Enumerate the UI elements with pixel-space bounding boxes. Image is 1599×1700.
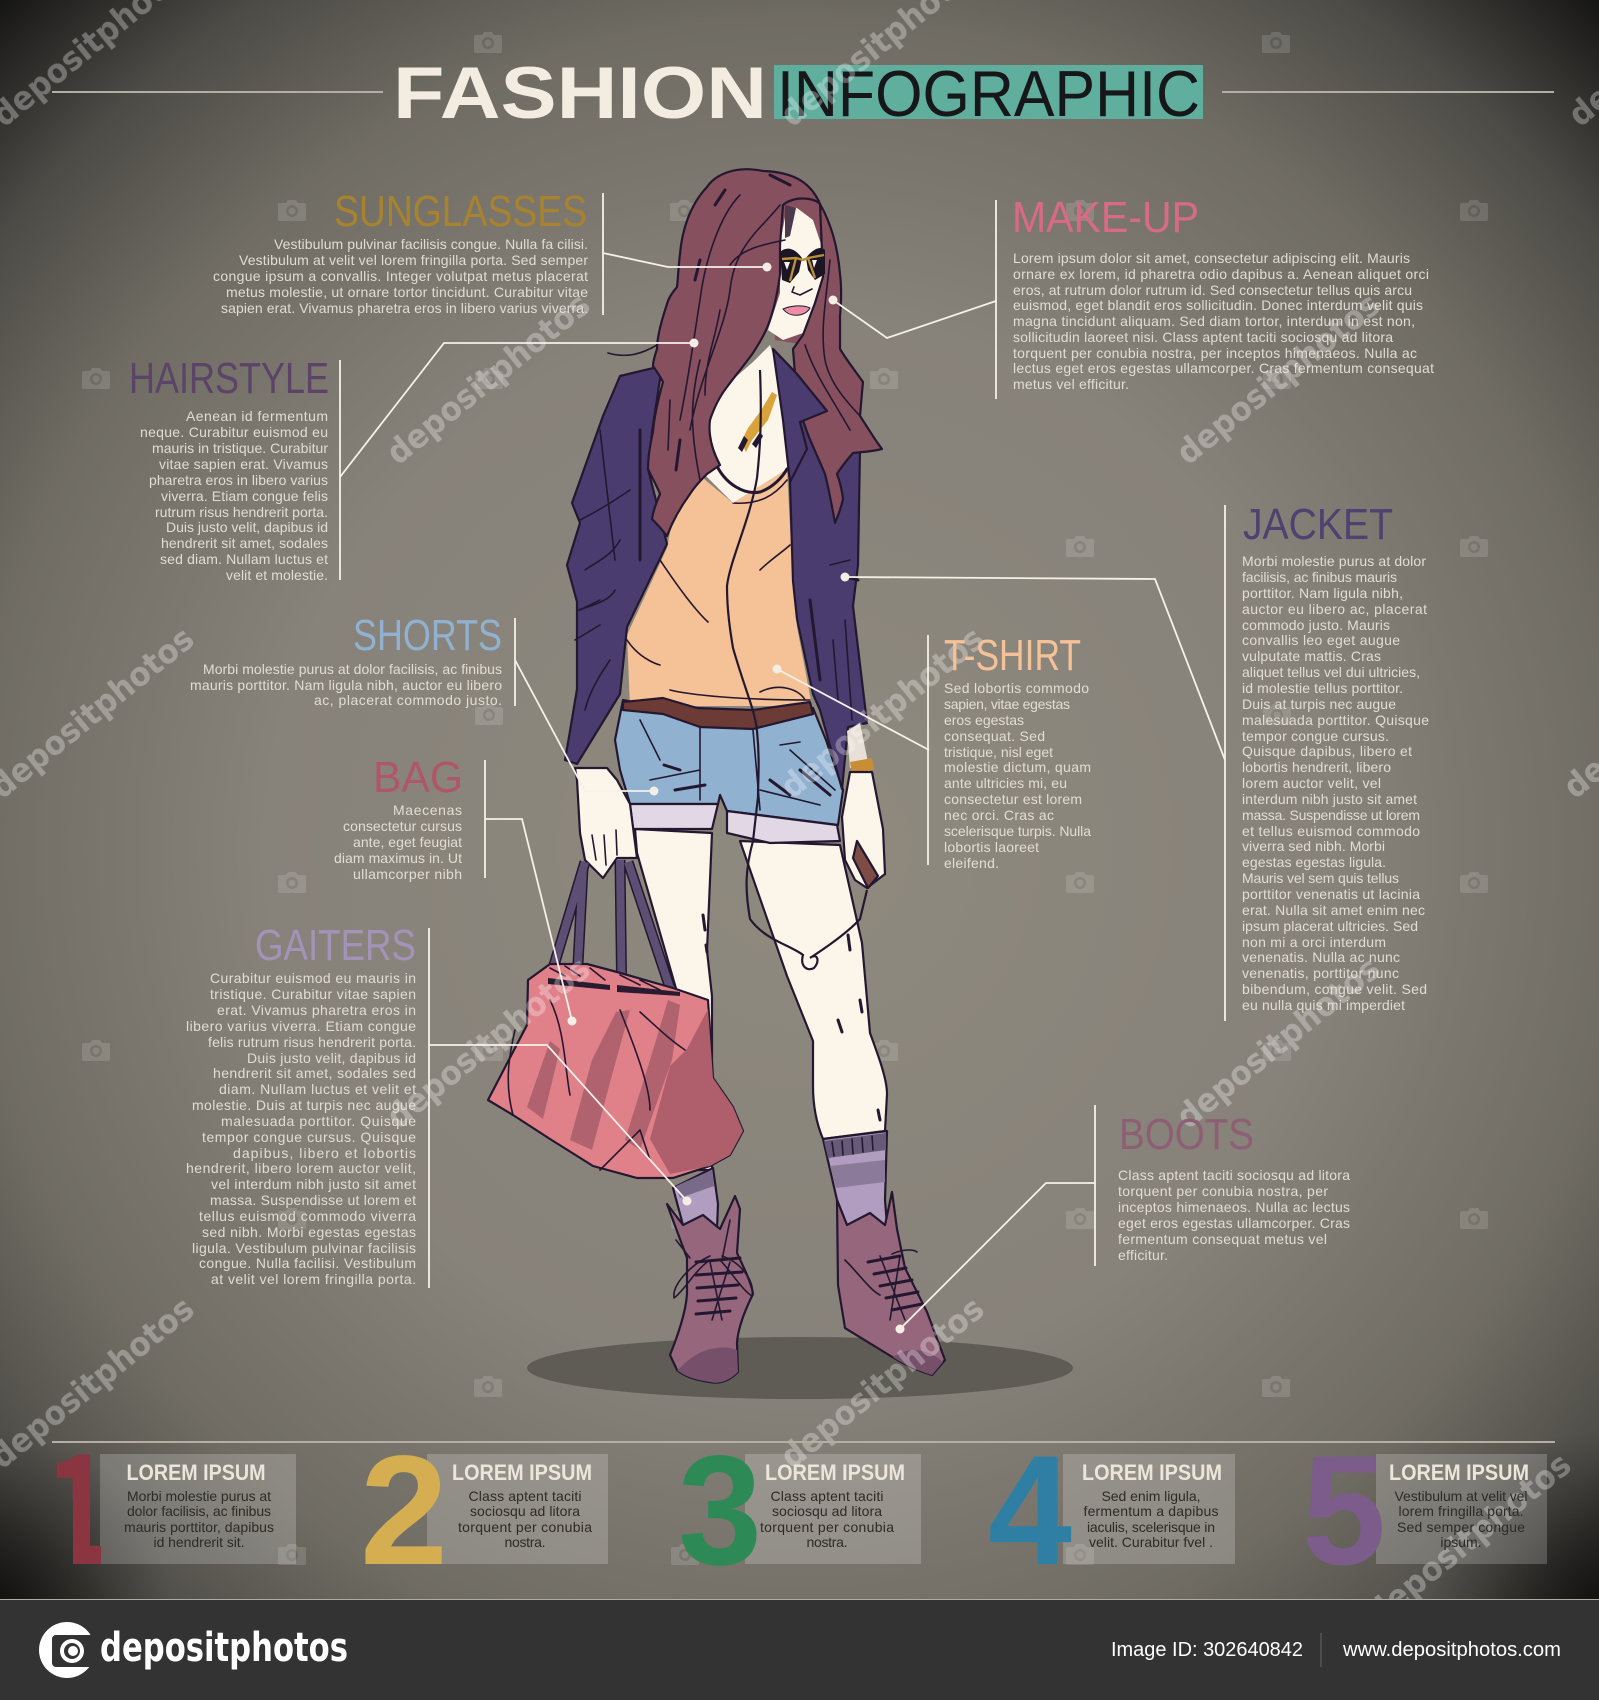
panel: jacket (840, 500, 1429, 1021)
text: gaiters: libero varius viverra. Etiam congue (186, 1018, 416, 1034)
number 4: 4 (988, 1424, 1072, 1598)
text: bag: ullamcorper nibh (353, 866, 462, 882)
number 3: 3 (678, 1424, 762, 1598)
text: jacket: massa. Suspendisse ut lorem (1242, 807, 1420, 823)
watermarks: depositphotos: depositphotos (772, 619, 991, 806)
jacket left (565, 366, 667, 764)
text: jacket: lorem auctor velit, vel (1242, 775, 1381, 791)
neckline (715, 462, 787, 493)
text: make-up: ornare ex lorem, id pharetra odio dapibus a. Aenean aliquet orci (1013, 266, 1429, 282)
heading: shorts: SHORTS (353, 611, 502, 660)
text: sunglasses: sapien erat. Vivamus pharetra eros in libero varius viverra. (221, 300, 588, 316)
t-shirt folds (627, 480, 810, 700)
ground shadow (527, 1337, 1073, 1399)
fingers (592, 830, 617, 865)
watermarks: depositphotos: depositphotos (378, 949, 597, 1136)
text: jacket: egestas egestas ligula. (1242, 854, 1386, 870)
callout line: shorts (515, 618, 658, 796)
text: gaiters: massa. Suspendisse ut lorem et (210, 1192, 416, 1208)
text: gaiters: molestie. Duis at turpis nec augue (192, 1097, 416, 1113)
leg ink marks (703, 915, 880, 1120)
step 5 heading: LOREM IPSUM (1389, 1460, 1529, 1485)
step 4 heading: LOREM IPSUM (1082, 1460, 1222, 1485)
step 2 heading: LOREM IPSUM (452, 1460, 592, 1485)
number 1: 1 (44, 1388, 114, 1608)
text: jacket: tempor congue cursus. (1242, 728, 1389, 744)
watch band (850, 758, 874, 773)
text: gaiters (186, 970, 416, 1287)
lips (783, 306, 810, 315)
camera watermark grid (82, 32, 1488, 1565)
text: make-up: lectus eget eros egestas ullamcorper. Cras fermentum consequat (1013, 360, 1434, 376)
text: make-up (1013, 250, 1434, 392)
jacket lapel (773, 349, 827, 482)
text: make-up: sollicitudin laoreet nisi. Class aptent taciti sociosqu ad litora (1013, 329, 1393, 345)
text: boots: fermentum consequat metus vel (1118, 1231, 1327, 1247)
text: hairstyle: sed diam. Nullam luctus et (160, 551, 328, 567)
step 1 heading: LOREM IPSUM (126, 1460, 266, 1485)
text: t-shirt: molestie dictum, quam (944, 759, 1091, 775)
callout line: boots (896, 1105, 1095, 1334)
text: jacket: venenatis, porttitor nunc (1242, 965, 1399, 981)
boot laces (674, 1220, 943, 1383)
text: gaiters: congue. Nulla facilisi. Vestibulum (199, 1255, 416, 1271)
necklace (741, 392, 777, 452)
step 5 (1302, 1424, 1547, 1598)
watermarks: depositphotos: depositphotos (1168, 285, 1387, 472)
text: t-shirt: lobortis laoreet (944, 839, 1039, 855)
watermarks: depositphotos: depositphotos (772, 1289, 991, 1476)
step 1 text: dolor facilisis, ac finibus (127, 1503, 271, 1519)
text: make-up: magna tincidunt aliquam. Sed diam tortor, interdum in est non, (1013, 313, 1415, 329)
step 1 (44, 1388, 296, 1608)
text: gaiters: hendrerit, libero lorem auctor velit, (186, 1160, 416, 1176)
text: hairstyle: mauris in tristique. Curabitur (152, 440, 328, 456)
text: jacket: et tellus euismod commodo (1242, 823, 1420, 839)
text: jacket: facilisis, ac finibus mauris (1242, 569, 1397, 585)
text: boots (1118, 1167, 1350, 1263)
panel: gaiters (186, 921, 692, 1288)
text: gaiters: felis rutrum risus hendrerit porta. (208, 1034, 416, 1050)
text: jacket: auctor eu libero ac, placerat (1242, 601, 1427, 617)
step 5 text: ipsum. (1440, 1534, 1482, 1550)
callout line: bag (485, 760, 576, 1026)
step 2 text: sociosqu ad litora (470, 1503, 580, 1519)
text: gaiters: erat. Vivamus pharetra eros in (217, 1002, 416, 1018)
title word: FASHION: FASHION (393, 53, 767, 134)
text: sunglasses (213, 236, 588, 316)
text: gaiters: Duis justo velit, dapibus id (247, 1050, 416, 1066)
text: make-up: euismod, eget blandit eros sollicitudin. Donec interdum velit quis (1013, 297, 1423, 313)
text: gaiters: hendrerit sit amet, sodales sed (213, 1065, 416, 1081)
footer bar (0, 1600, 1599, 1700)
shorts (615, 700, 843, 825)
back of head hair (760, 172, 832, 345)
text: hairstyle (140, 408, 328, 583)
callout line: hairstyle (340, 338, 698, 580)
step 5 text: Vestibulum at velit vel (1394, 1488, 1528, 1504)
text: gaiters: Curabitur euismod eu mauris in (210, 970, 416, 986)
heading: t-shirt: T-SHIRT (944, 631, 1081, 680)
watermarks: depositphotos: depositphotos (1168, 949, 1387, 1136)
text: t-shirt: eros egestas (944, 712, 1024, 728)
text: sunglasses: Vestibulum pulvinar facilisis congue. Nulla fa cilisi. (274, 236, 588, 252)
text: t-shirt: eleifend. (944, 855, 999, 871)
text: boots: inceptos himenaeos. Nulla ac lectus (1118, 1199, 1350, 1215)
text: bag: Maecenas (393, 802, 462, 818)
jacket folds (575, 430, 852, 720)
step 2 (360, 1424, 608, 1598)
front hair (648, 169, 820, 536)
heading: make-up: MAKE-UP (1012, 193, 1199, 242)
logo wordmark: depositphotos (100, 1625, 348, 1671)
title word: INFOGRAPHIC on teal band: INFOGRAPHIC (777, 57, 1200, 130)
panel: make-up (828, 193, 1434, 399)
text: t-shirt: tristique, nisl eget (944, 744, 1053, 760)
nose (792, 287, 812, 295)
text: jacket: porttitor venenatis ut lacinia (1242, 886, 1420, 902)
earphone cord (727, 370, 867, 969)
text: t-shirt: ante ultricies mi, eu (944, 775, 1067, 791)
bag shading (508, 966, 743, 1174)
text: bag: diam maximus in. Ut (334, 850, 462, 866)
text: t-shirt: Sed lobortis commodo (944, 680, 1089, 696)
panel: shorts (190, 611, 658, 796)
step 2 text: nostra. (504, 1534, 546, 1550)
text: jacket: commodo justo. Mauris (1242, 617, 1390, 633)
text: gaiters: dapibus, libero et lobortis (233, 1145, 416, 1161)
sunglasses (780, 248, 825, 283)
text: jacket: porttitor. Nam ligula nibh, (1242, 585, 1403, 601)
text: make-up: eros, at rutrum dolor rutrum id. Sed consectetur tellus quis arcu (1013, 282, 1412, 298)
panel: bag (334, 753, 576, 1026)
text: jacket: Morbi molestie purus at dolor (1242, 553, 1426, 569)
text: t-shirt: consectetur est lorem (944, 791, 1082, 807)
text: t-shirt: sapien, vitae egestas (944, 696, 1070, 712)
face (768, 207, 823, 340)
text: jacket: eu nulla quis mi imperdiet (1242, 997, 1405, 1013)
text: gaiters: ligula. Vestibulum pulvinar facilisis (192, 1240, 416, 1256)
shorts cuffs (630, 804, 840, 843)
heading: sunglasses: SUNGLASSES (334, 187, 587, 236)
text: sunglasses: Vestibulum at velit vel lorem fringilla porta. Sed semper (239, 252, 588, 268)
watermarks: depositphotos: depositphotos (378, 285, 597, 472)
number 5: 5 (1302, 1424, 1386, 1598)
step 3 text: sociosqu ad litora (772, 1503, 882, 1519)
callout line: jacket (840, 505, 1225, 1021)
text: bag: consectetur cursus (343, 818, 462, 834)
text: jacket: erat. Nulla sit amet enim nec (1242, 902, 1425, 918)
text: gaiters: tempor congue cursus. Quisque (202, 1129, 416, 1145)
text: shorts: Morbi molestie purus at dolor facilisis, ac finibus (203, 661, 502, 677)
bottom divider (52, 1441, 1555, 1443)
image id: Image ID: 302640842 (1111, 1639, 1303, 1661)
text: hairstyle: hendrerit sit amet, sodales (161, 535, 328, 551)
right hand (842, 772, 885, 888)
text: jacket: aliquet tellus vel dui ultricies, (1242, 664, 1420, 680)
text: t-shirt: scelerisque turpis. Nulla (944, 823, 1091, 839)
heading: boots: BOOTS (1119, 1110, 1254, 1159)
step 1 text: id hendrerit sit. (154, 1534, 244, 1550)
text: jacket: Duis at turpis nec augue (1242, 696, 1396, 712)
number 2: 2 (360, 1424, 448, 1598)
text: gaiters: tristique. Curabitur vitae sapien (210, 986, 416, 1002)
text: boots: efficitur. (1118, 1247, 1168, 1263)
text: gaiters: vel interdum nibh justo sit amet (211, 1176, 416, 1192)
text: jacket: Quisque dapibus, libero et (1242, 743, 1412, 759)
website url: www.depositphotos.com (1342, 1639, 1561, 1661)
callout line: make-up (828, 200, 996, 399)
bag (488, 964, 743, 1178)
left cuff and hand (575, 768, 637, 878)
text: jacket: Mauris vel sem quis tellus (1242, 870, 1399, 886)
step 4 text: iaculis, scelerisque in (1087, 1519, 1215, 1535)
step 5 text: lorem fringilla porta. (1398, 1503, 1524, 1519)
text: jacket (1242, 553, 1429, 1013)
text: gaiters: sed nibh. Morbi egestas egestas (202, 1224, 416, 1240)
step 5 text (1394, 1488, 1528, 1550)
text: bag (334, 802, 462, 882)
text: gaiters: diam. Nullam luctus et velit et (219, 1081, 416, 1097)
text: hairstyle: neque. Curabitur euismod eu (140, 424, 328, 440)
heading: hairstyle: HAIRSTYLE (129, 354, 329, 403)
step 3 (678, 1424, 921, 1598)
text: shorts (190, 661, 502, 708)
step 3 text: torquent per conubia (760, 1519, 894, 1535)
step 3 heading: LOREM IPSUM (765, 1460, 905, 1485)
left leg (635, 829, 712, 1170)
text: jacket: viverra sed nibh. Morbi (1242, 838, 1385, 854)
heading: bag: BAG (373, 753, 463, 802)
right arm wrist (847, 723, 870, 772)
neck and chest (700, 345, 790, 503)
step 4 (988, 1424, 1235, 1598)
heading: jacket: JACKET (1243, 500, 1393, 549)
step 4 text (1084, 1488, 1218, 1550)
panel: sunglasses (213, 187, 772, 316)
text: boots: torquent per conubia nostra, per (1118, 1183, 1328, 1199)
text: jacket: vulputate mattis. Cras (1242, 648, 1381, 664)
t-shirt (627, 469, 812, 706)
step 4 text: velit. Curabitur fvel . (1089, 1534, 1213, 1550)
watermarks: depositphotos: depositphotos (1359, 1445, 1578, 1632)
text: t-shirt: nec orci. Cras ac (944, 807, 1054, 823)
text: bag: ante, eget feugiat (353, 834, 462, 850)
text: gaiters: at velit vel lorem fringilla porta. (211, 1271, 416, 1287)
panel: hairstyle (129, 338, 698, 583)
shorts details (640, 720, 835, 810)
text: boots: Class aptent taciti sociosqu ad litora (1118, 1167, 1350, 1183)
text: hairstyle: rutrum risus hendrerit porta. (155, 504, 328, 520)
step 4 text: fermentum a dapibus (1084, 1503, 1218, 1519)
text: t-shirt: consequat. Sed (944, 728, 1045, 744)
jacket right (773, 349, 867, 789)
text: make-up: metus vel efficitur. (1013, 376, 1129, 392)
panel: t-shirt (772, 631, 1091, 871)
text: boots: eget eros egestas ullamcorper. Cras (1118, 1215, 1350, 1231)
text: hairstyle: pharetra eros in libero varius (149, 472, 328, 488)
hair shadow patch at temple (785, 205, 796, 238)
bag handles (552, 860, 670, 1013)
text: make-up: torquent per conubia nostra, per inceptos himenaeos. Nulla ac (1013, 345, 1417, 361)
panel: boots (896, 1105, 1350, 1334)
step 3 text: Class aptent taciti (770, 1488, 884, 1504)
text: jacket: non mi a orci interdum (1242, 934, 1386, 950)
step 1 text (124, 1488, 274, 1550)
step 1 text: mauris porttitor, dapibus (124, 1519, 274, 1535)
text: jacket: bibendum, congue velit. Sed (1242, 981, 1427, 997)
text: shorts: ac, placerat commodo justo. (314, 692, 502, 708)
text: sunglasses: metus molestie, ut ornare tortor tincidunt. Curabitur vitae (226, 284, 588, 300)
text: jacket: convallis leo eget augue (1242, 632, 1400, 648)
text: jacket: lobortis hendrerit, libero (1242, 759, 1391, 775)
icon: camera logo (39, 1622, 96, 1678)
text: hairstyle: Duis justo velit, dapibus id (166, 519, 328, 535)
text: hairstyle: Aenean id fermentum (186, 408, 328, 424)
music player (853, 841, 878, 888)
text: gaiters: tellus euismod commodo viverra (199, 1208, 416, 1224)
step 5 text: Sed semper congue (1397, 1519, 1525, 1535)
text: hairstyle: velit et molestie. (226, 567, 328, 583)
step 3 text: nostra. (806, 1534, 848, 1550)
left boot (667, 1196, 753, 1383)
text: make-up: Lorem ipsum dolor sit amet, consectetur adipiscing elit. Mauris (1013, 250, 1410, 266)
callout line: sunglasses (603, 193, 772, 315)
text: jacket: id molestie tellus porttitor. (1242, 680, 1403, 696)
step 4 text: Sed enim ligula, (1102, 1488, 1200, 1504)
back hair right (793, 204, 882, 523)
right leg (740, 841, 887, 1139)
gaiters (673, 1131, 887, 1229)
text: jacket: venenatis. Nulla ac nunc (1242, 949, 1400, 965)
text: sunglasses: congue ipsum a convallis. Integer volutpat metus placerat (213, 268, 588, 284)
text: gaiters: malesuada porttitor. Quisque (221, 1113, 416, 1129)
text: shorts: mauris porttitor. Nam ligula nibh, auctor eu libero (190, 677, 502, 693)
text: hairstyle: vitae sapien erat. Vivamus (159, 456, 328, 472)
step 1 text: Morbi molestie purus at (127, 1488, 271, 1504)
step 2 text: torquent per conubia (458, 1519, 592, 1535)
hair strands (608, 195, 860, 480)
fashion figure (488, 169, 945, 1383)
callout line: t-shirt (772, 635, 929, 865)
title (52, 53, 1554, 134)
belt (623, 698, 813, 729)
step 3 text (760, 1488, 894, 1550)
step 2 text (458, 1488, 592, 1550)
callout line: gaiters (429, 928, 692, 1288)
text: jacket: interdum nibh justo sit amet (1242, 791, 1417, 807)
right boot (837, 1192, 945, 1375)
text: jacket: ipsum placerat ultricies. Sed (1242, 918, 1418, 934)
heading: gaiters: GAITERS (255, 921, 416, 970)
text: hairstyle: viverra. Etiam congue felis (161, 488, 328, 504)
step 2 text: Class aptent taciti (468, 1488, 582, 1504)
text: t-shirt (944, 680, 1091, 871)
text: jacket: malesuada porttitor. Quisque (1242, 712, 1429, 728)
